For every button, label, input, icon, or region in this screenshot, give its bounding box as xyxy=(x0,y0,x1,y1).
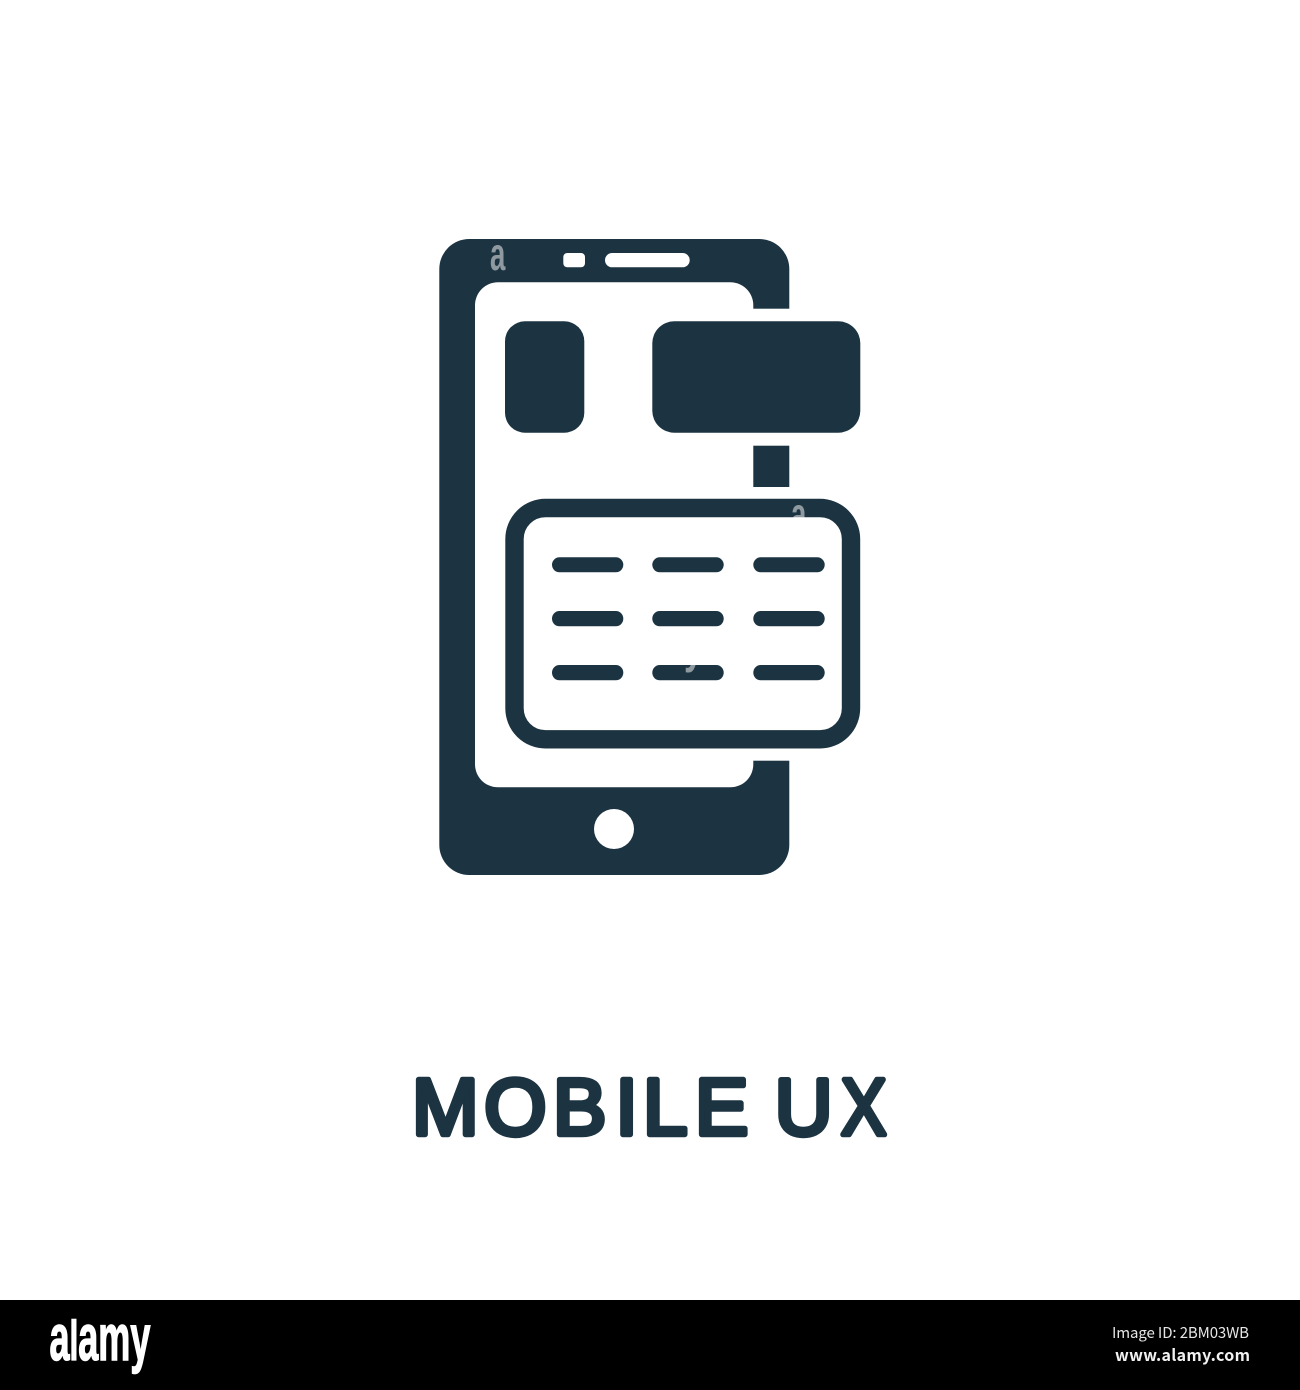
table row 3 xyxy=(552,665,825,680)
footer bar xyxy=(0,1300,1300,1390)
watermark fragments: a xyxy=(791,490,807,541)
camera xyxy=(563,253,585,267)
wide block xyxy=(652,321,860,433)
icon: mobile UX smartphone xyxy=(439,239,860,875)
image ID: Image ID: 2BM03WB xyxy=(1112,1322,1249,1343)
website: www.alamy.com xyxy=(1115,1342,1250,1366)
home button xyxy=(594,809,634,849)
logo: alamy: alamy xyxy=(50,1302,150,1375)
footer background xyxy=(0,1300,1300,1390)
table row 1 xyxy=(552,557,825,572)
watermark fragments: a xyxy=(490,230,506,281)
table card frame xyxy=(514,508,851,739)
phone screen xyxy=(475,282,753,787)
watermark fragments xyxy=(490,230,807,673)
watermark fragments: y xyxy=(684,621,704,673)
gap in phone edge behind upper card xyxy=(753,309,791,446)
title: X xyxy=(841,1062,886,1152)
speaker xyxy=(605,253,690,267)
title: MOBILE U xyxy=(412,1062,833,1151)
table row 2 xyxy=(552,611,825,626)
small square block xyxy=(505,321,584,433)
gap in phone edge behind table card xyxy=(753,487,791,761)
table card xyxy=(514,508,851,739)
phone body xyxy=(439,239,789,875)
